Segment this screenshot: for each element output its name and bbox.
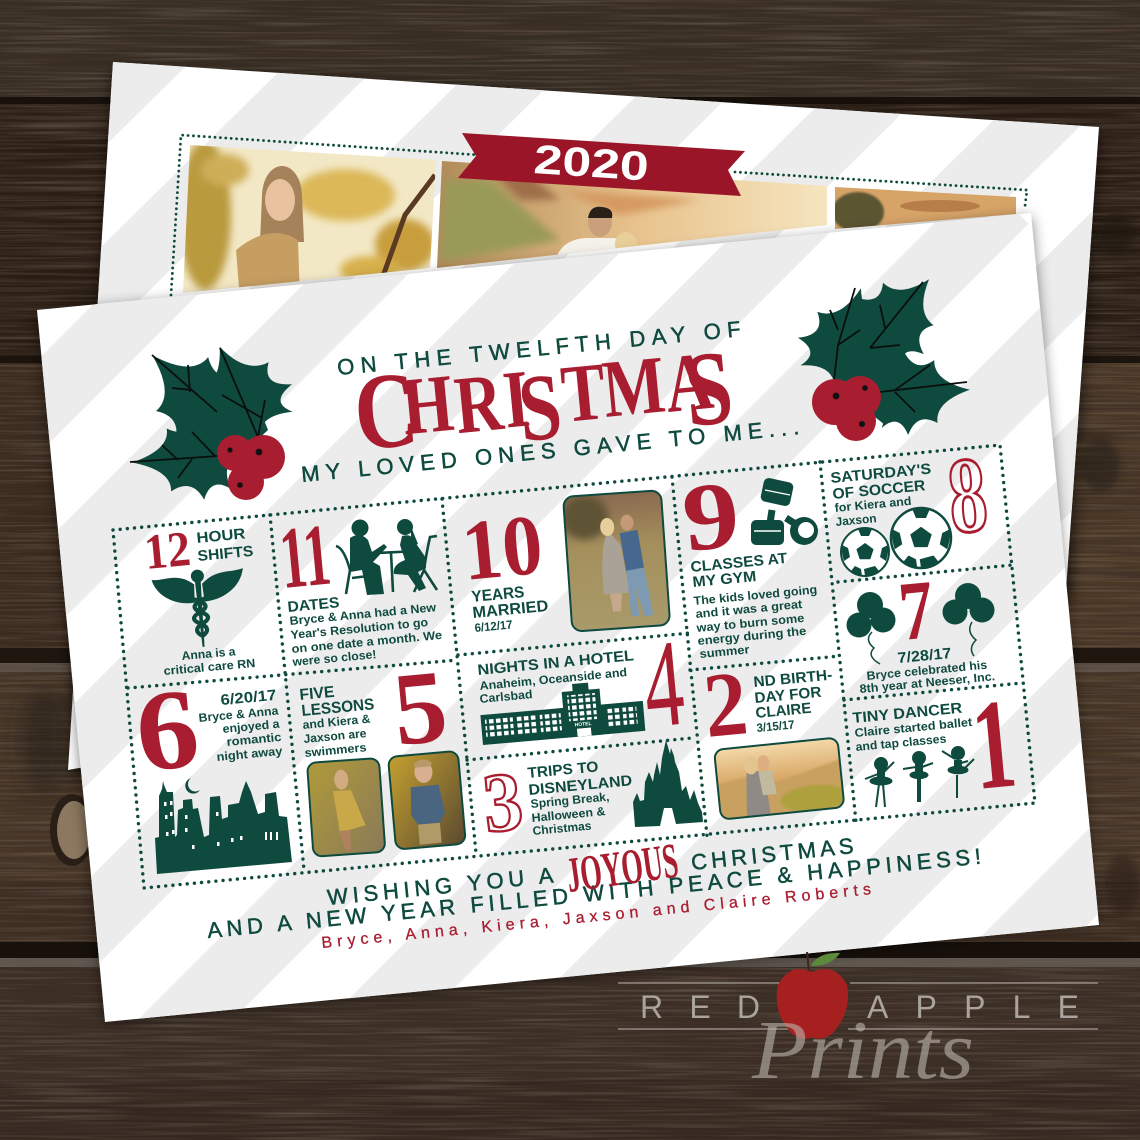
panel: 8 saturdays of soccer: 8	[943, 435, 992, 557]
panel: 8 saturdays of soccer: Jaxson	[835, 511, 877, 529]
back card stripes	[72, 62, 1094, 704]
banner: 2020: 2020	[532, 136, 650, 190]
panel: 6 romantic night away: Bryce & Anna	[198, 703, 279, 725]
icon: apple	[777, 952, 848, 1039]
panel: 12 hour shifts	[142, 520, 256, 678]
back dotted frame	[171, 135, 1027, 295]
icon: balloons	[846, 583, 994, 664]
footer greeting: WISHING YOU A	[326, 863, 555, 910]
photo: third landscape	[835, 187, 1016, 229]
panel: 9 classes at my gym: energy during the	[697, 624, 807, 648]
title: MY LOVED ONES GAVE TO ME...	[300, 414, 800, 487]
panel: 5 swim lessons: LESSONS	[301, 696, 375, 720]
panel: 10 years married	[458, 490, 670, 635]
panel: 4 nights in a hotel	[477, 614, 689, 754]
icon: soccer balls	[841, 508, 951, 576]
front card stripes	[41, 214, 1098, 1019]
panel: 7 years at Neeser: 7/28/17	[897, 645, 952, 667]
panel: 11 dates: DATES	[287, 594, 340, 616]
panel: 4 nights in a hotel: NIGHTS IN A HOTEL	[477, 647, 635, 679]
panel: 10 years married: 6/12/17	[474, 617, 513, 635]
panel: 2nd birthday: 3/15/17	[756, 717, 795, 735]
panel: 10 years married: MARRIED	[472, 598, 549, 622]
title: C	[349, 349, 423, 474]
panel: 3 trips to Disneyland	[479, 740, 703, 851]
panel: 7 years at Neeser: Bryce celebrated his	[866, 658, 988, 683]
panel: 9 classes at my gym: summer	[699, 642, 750, 661]
panel: 3 trips to Disneyland: TRIPS TO	[527, 758, 599, 782]
title: H	[398, 358, 457, 453]
panel: 4 nights in a hotel: Anaheim, Oceanside and	[479, 665, 628, 693]
panel: 7 years at Neeser: 7	[895, 563, 938, 659]
panel: 1 tiny dancer: 1	[966, 672, 1021, 817]
panel: 3 trips to Disneyland: 3	[479, 755, 527, 851]
panel: 9 classes at my gym: CLASSES AT	[690, 550, 788, 576]
title: A	[661, 336, 717, 431]
panel: 5 swim lessons: and Kiera &	[302, 712, 371, 732]
photo: girl in yellow dress	[307, 758, 385, 857]
panel: 12 hour shifts: 12	[142, 520, 193, 580]
panel: 2nd birthday: CLAIRE	[755, 700, 812, 722]
panel: 8 saturdays of soccer: for Kiera and	[834, 494, 912, 515]
panel: 6 romantic night away	[130, 664, 292, 874]
panel: 1 tiny dancer: and tap classes	[855, 731, 947, 754]
footer greeting: JOYOUS	[563, 832, 681, 903]
watermark: Red Apple Prints: APPLE	[867, 989, 1079, 1025]
icon: caduceus	[151, 566, 249, 651]
panel: 4 nights in a hotel: Carlsbad	[479, 687, 533, 706]
panel: 5 swim lessons: swimmers	[304, 740, 367, 760]
panel: 2nd birthday: 2	[699, 651, 752, 757]
panel: 2nd birthday: DAY FOR	[754, 684, 822, 707]
panel: 6 romantic night away: 6/20/17	[220, 687, 277, 709]
front card	[34, 208, 1100, 1027]
panel: 3 trips to Disneyland: Halloween &	[531, 804, 606, 825]
panel: 5 swim lessons: 5	[388, 648, 452, 768]
panel: 11 dates: were so close!	[291, 647, 377, 669]
panel: 9 classes at my gym: The kids loved going	[693, 582, 818, 608]
panel: 1 tiny dancer	[852, 672, 1021, 817]
dotted grid frame	[113, 445, 1035, 888]
icon: hotel	[478, 678, 645, 745]
icon: castle	[633, 740, 703, 827]
title: S	[514, 352, 566, 462]
panel: 4 nights in a hotel: 4	[638, 614, 689, 754]
photo: couple	[559, 490, 670, 632]
panel: 8 saturdays of soccer: SATURDAY'S	[830, 461, 932, 487]
panel: 3 trips to Disneyland: Christmas	[532, 818, 592, 838]
panel: 3 trips to Disneyland: Spring Break,	[530, 790, 610, 811]
panel: 1 tiny dancer: TINY DANCER	[852, 700, 963, 727]
watermark: Red Apple Prints: RED	[640, 989, 760, 1025]
panel: 9 classes at my gym: and it was a great	[695, 597, 803, 621]
icon: dumbbells	[751, 477, 818, 545]
panel: 12 hour shifts: Anna is a	[181, 644, 236, 663]
photo: girl in autumn trees	[183, 145, 436, 293]
panel: 3 trips to Disneyland: DISNEYLAND	[528, 772, 633, 799]
footer greeting: Bryce, Anna, Kiera, Jaxson and Claire Roberts	[321, 881, 872, 952]
panel: 5 swim lessons: Jaxson are	[303, 726, 367, 746]
title	[300, 316, 800, 487]
panel: 11 dates: Year's Resolution to go	[290, 615, 429, 642]
panel: 5 swim lessons	[300, 673, 466, 858]
panel: 9 classes at my gym	[678, 460, 818, 661]
panel: 2nd birthday: ND BIRTH-	[753, 667, 833, 691]
photo: boy in denim shirt	[388, 751, 466, 850]
panel: 11 dates: on one date a month. We	[291, 628, 443, 656]
panel: 7 years at Neeser: 8th year at Neeser, Inc.	[859, 669, 996, 696]
title: ON THE TWELFTH DAY OF	[336, 316, 742, 380]
photo: mother and daughter	[714, 737, 850, 821]
title: I	[499, 354, 533, 446]
panel: 7 years at Neeser	[846, 563, 996, 696]
panel: 9 classes at my gym: 9	[678, 460, 744, 572]
panel: 12 hour shifts: HOUR	[196, 525, 246, 547]
panel: 11 dates	[276, 507, 443, 669]
panel: 9 classes at my gym: MY GYM	[692, 568, 757, 591]
banner: 2020	[458, 133, 745, 196]
photo: couple and mountains	[437, 161, 827, 268]
watermark: Red Apple Prints	[618, 952, 1098, 1097]
panel: 10 years married: YEARS	[471, 584, 525, 606]
icon: ballerinas	[865, 746, 974, 807]
back card	[63, 62, 1103, 782]
icon: city skyline with moon	[155, 778, 292, 874]
footer greeting: CHRISTMAS	[690, 833, 855, 875]
panel: 11 dates: 11	[276, 507, 335, 608]
icon: couple at table	[336, 519, 437, 595]
panel: 8 saturdays of soccer	[830, 435, 992, 576]
panel: 12 hour shifts: SHIFTS	[197, 543, 254, 565]
panel: 6 romantic night away: 6	[130, 664, 204, 796]
title: T	[557, 346, 610, 441]
footer greeting: AND A NEW YEAR FILLED WITH PEACE & HAPPINESS!	[206, 844, 982, 943]
panel: 2nd birthday	[706, 670, 845, 820]
title: S	[679, 327, 738, 449]
icon: hotel: HOTEL	[574, 721, 592, 728]
holly: right	[789, 251, 972, 441]
panel: 1 tiny dancer: Claire started ballet	[854, 715, 973, 740]
panel: 10 years married: 10	[458, 496, 546, 599]
panel: 9 classes at my gym: way to burn some	[695, 611, 805, 635]
title: R	[451, 357, 508, 452]
watermark: Red Apple Prints: Prints	[751, 1004, 974, 1097]
panel: 11 dates: Bryce & Anna had a New	[289, 600, 437, 628]
panel: 6 romantic night away: romantic	[226, 730, 282, 749]
panel: 6 romantic night away: night away	[216, 744, 283, 764]
panel: 12 hour shifts: critical care RN	[163, 656, 256, 678]
panel: 5 swim lessons: FIVE	[299, 684, 336, 704]
panel: 6 romantic night away: enjoyed a	[222, 717, 280, 736]
panel: 8 saturdays of soccer: OF SOCCER	[832, 477, 926, 503]
title: M	[599, 340, 669, 436]
holly: left	[118, 319, 306, 504]
